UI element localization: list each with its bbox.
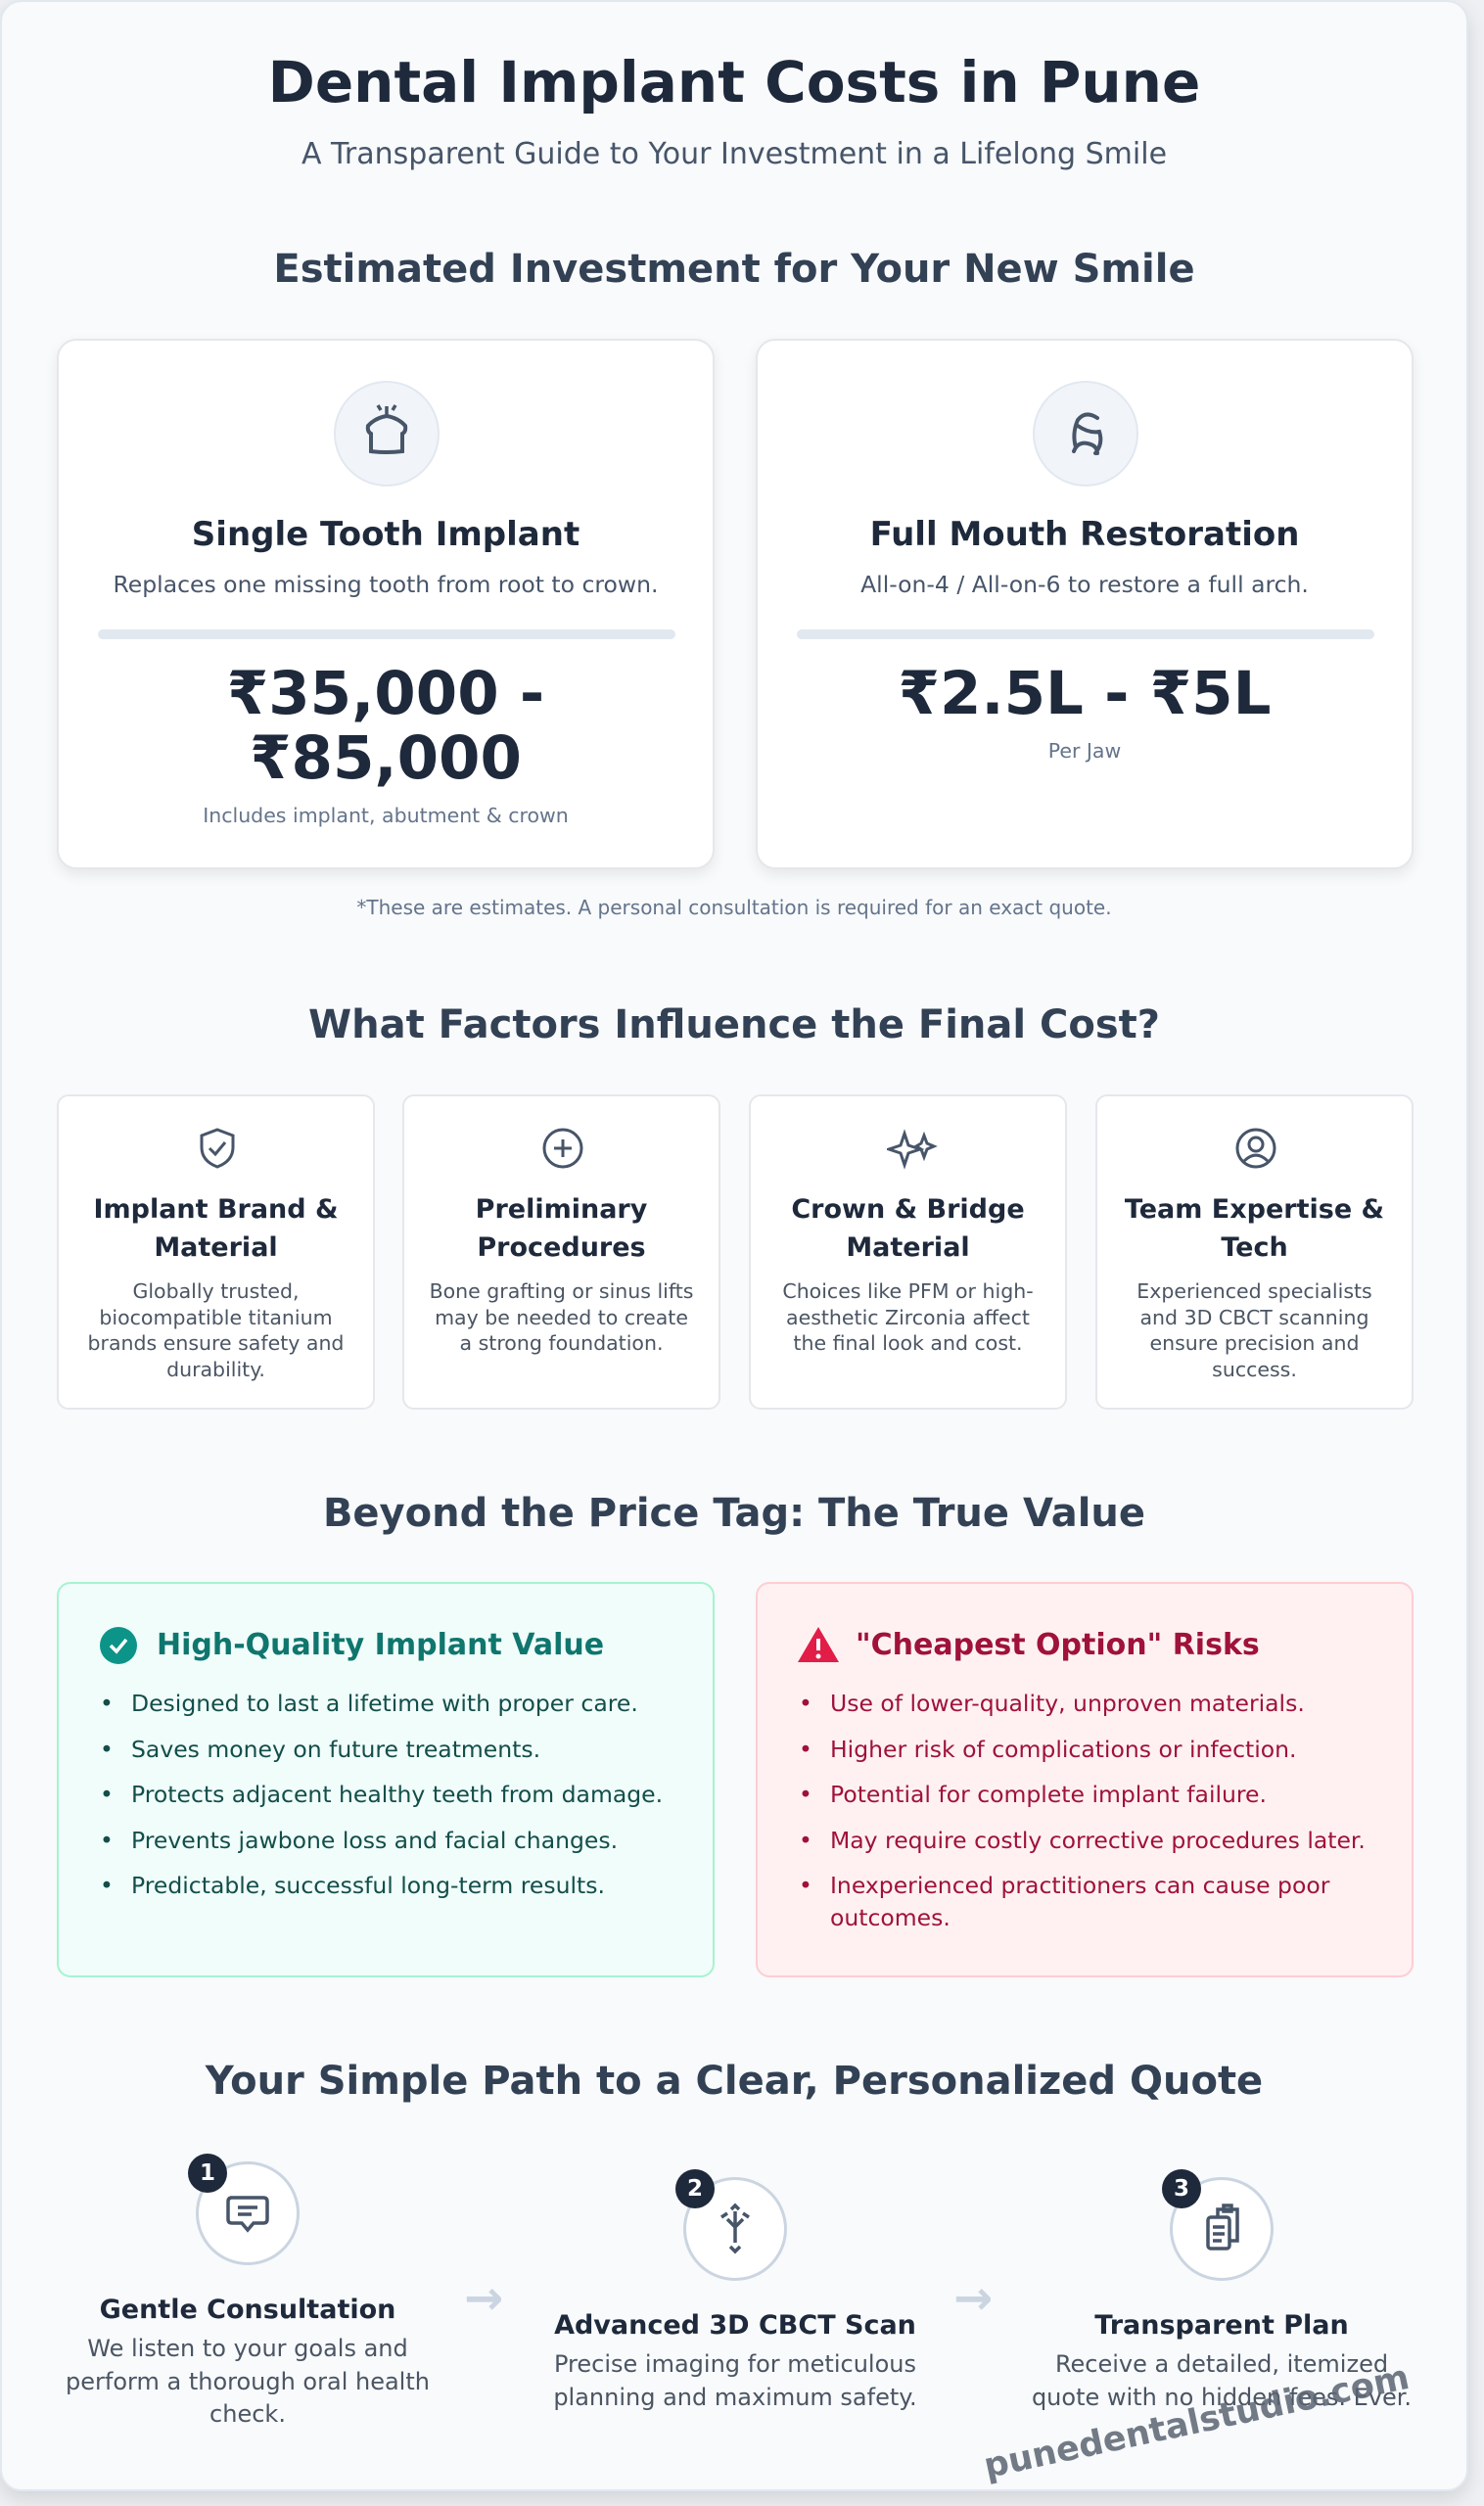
bullet list: Prevents jawbone loss and facial changes.: [131, 1827, 618, 1854]
heading: estimated investment: Estimated Investment for Your New Smile: [273, 247, 1195, 292]
step 3: [1032, 2169, 1412, 2410]
panel: factor team expertise: [1095, 1094, 1414, 1410]
bullet list: Predictable, successful long-term results.: [131, 1872, 605, 1899]
bullet list: Inexperienced practitioners can cause poor outcomes.: [830, 1872, 1329, 1931]
bullet list: Potential for complete implant failure.: [830, 1781, 1267, 1808]
icon: clipboard: [1170, 2177, 1274, 2281]
bullet list: Higher risk of complications or infection.: [830, 1735, 1297, 1762]
bullet list: Protects adjacent healthy teeth from damage.: [131, 1781, 663, 1808]
panel: factor team expertise: Team Expertise &: [1125, 1194, 1384, 1225]
panel: factor preliminary procedures: Preliminary: [476, 1194, 647, 1225]
panel: factor team expertise: Experienced specialists and 3D CBCT scanning ensure precision and success.: [1136, 1279, 1372, 1380]
title: Dental Implant Costs in Pune: [268, 49, 1200, 116]
badge 1: 1: [200, 2160, 215, 2186]
step 2: Precise imaging for meticulous planning and maximum safety.: [553, 2350, 917, 2410]
icon: shield: [200, 1128, 235, 1169]
price: [227, 659, 544, 793]
panel: factor crown material: Choices like PFM or high-aesthetic Zirconia affect the final look and cost.: [782, 1279, 1034, 1355]
price note: Per Jaw: [1048, 739, 1121, 763]
panel: factor crown material: [749, 1094, 1067, 1410]
step 1: [66, 2154, 430, 2428]
step 1: Gentle Consultation: [100, 2295, 395, 2325]
icon: tooth: [334, 381, 440, 487]
heading: factors: What Factors Influence the Final Cost?: [308, 1002, 1160, 1047]
panel: factor preliminary procedures: Bone grafting or sinus lifts may be needed to create a strong foundation.: [430, 1279, 693, 1355]
panel: factor crown material: Material: [846, 1232, 970, 1263]
arrow 2: →: [953, 2271, 993, 2326]
box title: High-Quality Implant Value: [157, 1628, 604, 1662]
panel: factor implant brand: Material: [154, 1232, 278, 1263]
panel: factor team expertise: Tech: [1221, 1232, 1288, 1263]
watermark: punedentalstudio.com: [981, 2358, 1413, 2486]
bullet list: [104, 1690, 663, 1899]
price: ₹2.5L - ₹5L: [899, 659, 1271, 728]
icon: scan: [683, 2177, 787, 2281]
disclaimer: *These are estimates. A personal consultation is required for an exact quote.: [356, 896, 1112, 919]
heading: true value: Beyond the Price Tag: The True Value: [323, 1491, 1145, 1536]
badge 1: [188, 2154, 227, 2193]
icon: warning: [798, 1627, 839, 1662]
price: ₹85,000: [250, 723, 522, 793]
bullet list: May require costly corrective procedures later.: [830, 1827, 1366, 1854]
badge 3: [1162, 2169, 1201, 2208]
step 1: We listen to your goals and perform a thorough oral health check.: [66, 2335, 430, 2428]
step 3: Receive a detailed, itemized quote with no hidden fees. Ever.: [1032, 2350, 1412, 2410]
subtitle: A Transparent Guide to Your Investment in a Lifelong Smile: [301, 137, 1167, 171]
icon: user: [1235, 1128, 1276, 1169]
panel: factor preliminary procedures: Procedures: [477, 1232, 646, 1263]
badge 3: 3: [1174, 2176, 1189, 2202]
price: ₹35,000 -: [227, 659, 544, 728]
icon: chat: [196, 2161, 300, 2265]
bullet list: [803, 1690, 1366, 1931]
step 2: [553, 2169, 917, 2410]
badge 2: 2: [687, 2176, 703, 2202]
badge 2: [675, 2169, 715, 2208]
bullet list: Saves money on future treatments.: [131, 1735, 540, 1762]
bullet list: Use of lower-quality, unproven materials.: [830, 1690, 1305, 1717]
icon: full arch: [1033, 381, 1138, 487]
icon: sparkles: [887, 1130, 938, 1169]
bullet list: Designed to last a lifetime with proper care.: [131, 1690, 638, 1717]
icon: plus circle: [542, 1128, 583, 1169]
panel: factor implant brand: Implant Brand &: [93, 1194, 339, 1225]
card title: Full Mouth Restoration: [870, 515, 1299, 554]
card description: Replaces one missing tooth from root to crown.: [114, 571, 658, 598]
heading: path: Your Simple Path to a Clear, Personalized Quote: [206, 2059, 1263, 2104]
panel: high quality value: [57, 1582, 715, 1977]
panel: factor implant brand: Globally trusted, biocompatible titanium brands ensure safety and durability.: [88, 1279, 344, 1380]
panel: cheapest risks: [756, 1582, 1414, 1977]
price note: Includes implant, abutment & crown: [203, 804, 569, 827]
step 3: Transparent Plan: [1094, 2310, 1349, 2341]
panel: full mouth restoration: [756, 339, 1414, 869]
panel: factor preliminary procedures: [402, 1094, 720, 1410]
card description: All-on-4 / All-on-6 to restore a full arch.: [860, 571, 1309, 598]
panel: factor crown material: Crown & Bridge: [791, 1194, 1025, 1225]
panel: factor implant brand: [57, 1094, 375, 1410]
box title: "Cheapest Option" Risks: [856, 1628, 1260, 1662]
card title: Single Tooth Implant: [192, 515, 580, 554]
step 2: Advanced 3D CBCT Scan: [554, 2310, 916, 2341]
panel: single tooth implant: [57, 339, 715, 869]
icon: check: [100, 1627, 137, 1664]
arrow 1: →: [464, 2271, 503, 2326]
